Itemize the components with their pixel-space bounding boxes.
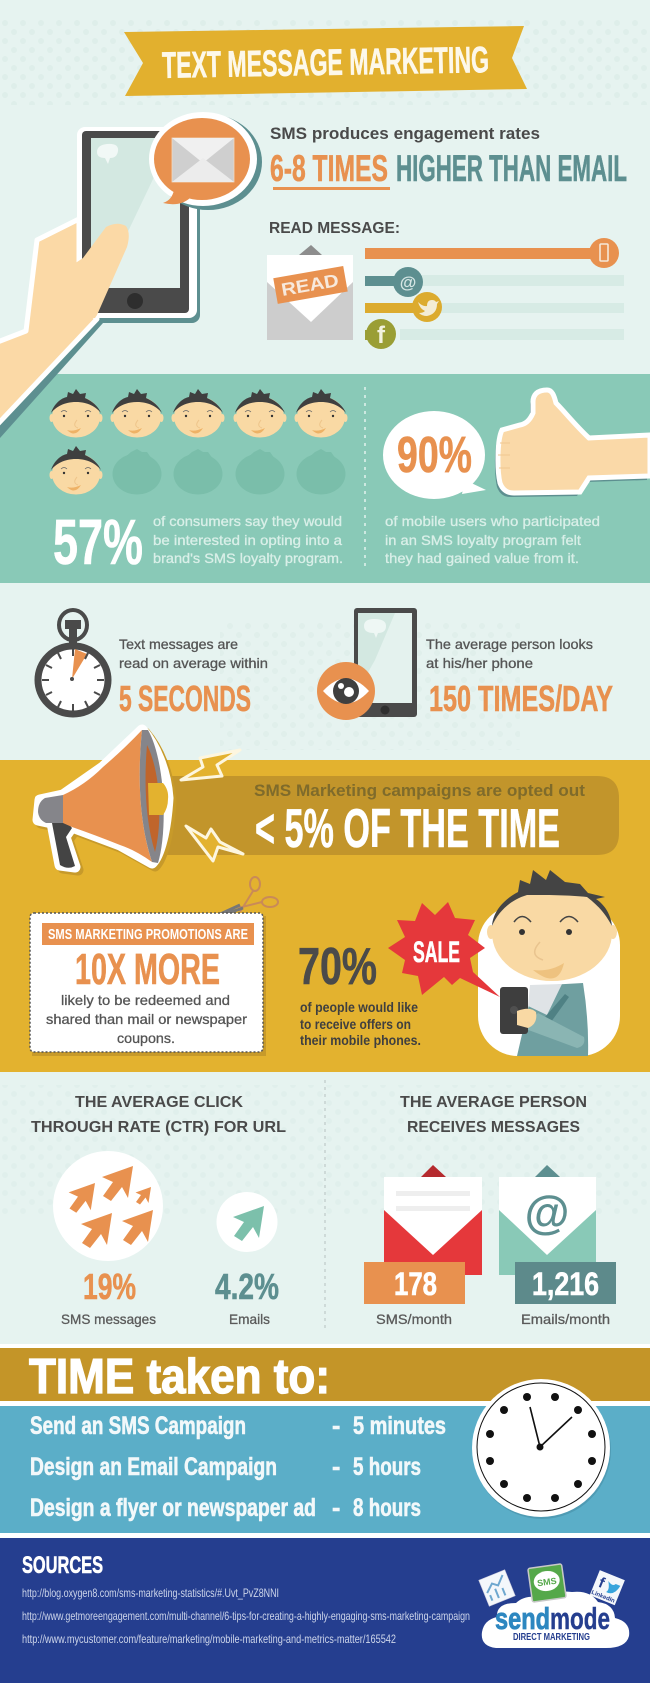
logo tile: SMS: [528, 1564, 566, 1602]
panel: time list: [0, 1406, 650, 1533]
phone: [77, 127, 200, 323]
time row: SMS: Send an SMS Campaign: [30, 1412, 246, 1440]
icon: scissors: [205, 877, 278, 921]
heading: average person receives: [400, 1094, 587, 1136]
stat: 1,216: 1,216: [532, 1266, 599, 1302]
coupon text: [46, 992, 247, 1046]
text: phone looks: The average person looks: [426, 636, 593, 652]
heading: average person receives: THE AVERAGE PERSON: [400, 1094, 587, 1111]
icon: sale starburst: [388, 902, 500, 997]
stat: 70%: 70%: [298, 938, 377, 996]
text: 70% description: [300, 999, 421, 1048]
bar: twitter: [365, 292, 624, 322]
icon: phone with eye: [317, 608, 417, 720]
stat: 90%: 90%: [397, 426, 472, 483]
message bubble: [149, 112, 262, 210]
text: 57% description: of consumers say they would: [153, 513, 342, 529]
bar: facebook: f: [377, 322, 386, 349]
logo: sendmode: DIRECT MARKETING: [513, 1632, 590, 1643]
headline: 6-8 times: 6-8 TIMES: [270, 148, 388, 189]
background dot pattern: middle: [220, 620, 520, 750]
source links: http://blog.oxygen8.com/sms-marketing-statistics/#.Uvt_PvZ8NNI: [22, 1586, 279, 1600]
coupon text: shared than mail or newspaper: [46, 1011, 247, 1027]
text: phone looks: [426, 636, 593, 671]
heading: click through rate: [31, 1094, 286, 1136]
pictogram: six of ten faces: [50, 389, 348, 494]
sale text: SALE: [413, 936, 460, 969]
head: [487, 925, 495, 939]
stat: 19%: 19%: [83, 1266, 136, 1307]
text: opted out: SMS Marketing campaigns are opted out: [254, 781, 585, 800]
source links: http://www.mycustomer.com/feature/marketing/mobile-marketing-and-metrics-matter/165542: [22, 1632, 396, 1646]
icon: email arrow circle: [216, 1192, 278, 1252]
source links: http://www.getmoreengagement.com/multi-channel/6-tips-for-creating-a-highly-engaging-sms-marketing-campaign: [22, 1609, 470, 1623]
panel: opt-out pill: [165, 776, 619, 855]
label: SMS messages: SMS messages: [61, 1311, 156, 1327]
heading: click through rate: THE AVERAGE CLICK: [75, 1094, 243, 1111]
panel: coupon: SMS MARKETING PROMOTIONS ARE: [48, 926, 248, 943]
title banner: [124, 26, 527, 96]
text: 57% description: be interested in opting into a: [153, 532, 342, 548]
heading: read message: READ MESSAGE:: [269, 220, 400, 237]
logo tile: social: LinkedIn: [590, 1590, 616, 1605]
panel: sources: [0, 1538, 650, 1683]
stat: 5 seconds: 5 SECONDS: [119, 678, 251, 719]
panel: coupon: [30, 913, 266, 1056]
text: engagement rates: SMS produces engagement rates: [270, 124, 540, 143]
bar chart: read rates by channel: [365, 238, 624, 349]
icon: lightning bolt top: [181, 750, 240, 780]
time row: flyer: -: [332, 1494, 340, 1522]
text: read within: read on average within: [119, 655, 268, 671]
text: 70% description: to receive offers on: [300, 1016, 411, 1032]
text: 90% description: in an SMS loyalty program felt: [385, 532, 581, 548]
stat: 4.2%: 4.2%: [215, 1266, 279, 1307]
text: 70% description: their mobile phones.: [300, 1032, 421, 1048]
time row: email: -: [332, 1453, 340, 1481]
bar: email: @: [400, 273, 416, 292]
text: read within: Text messages are: [119, 636, 238, 652]
bar: email: [365, 267, 624, 297]
speech bubble: 90%: [383, 411, 486, 499]
text: 90% description: [385, 513, 600, 566]
icon: stopwatch: [38, 610, 108, 714]
logo tile: SMS: SMS: [537, 1576, 557, 1588]
icon: teal envelope with 1,216: @: [525, 1186, 569, 1238]
heading: sources: SOURCES: [22, 1552, 103, 1579]
phone in hand: [500, 987, 528, 1034]
panel: gold band: [0, 760, 650, 1072]
stat: 178: 178: [394, 1266, 437, 1302]
panel: teal statistics band: [0, 374, 650, 583]
text: 57% description: [153, 513, 343, 566]
heading: click through rate: THROUGH RATE (CTR) FOR URL: [31, 1119, 286, 1136]
bar: facebook: [365, 319, 624, 349]
heading: time taken to: TIME taken to:: [29, 1350, 330, 1404]
panel: time header: [0, 1348, 650, 1401]
time row: SMS: 5 minutes: [353, 1412, 446, 1440]
icon: read envelope: [267, 245, 353, 340]
background dot pattern: top: [0, 20, 650, 105]
text: 90% description: of mobile users who participated: [385, 513, 600, 529]
illustration: phone in hand with message bubble: [0, 112, 262, 438]
time row: flyer: Design a flyer or newspaper ad: [30, 1494, 316, 1522]
megaphone shadow and outline: [38, 730, 171, 870]
logo wordmark: send: [495, 1601, 550, 1636]
white separator strip: [0, 1344, 650, 1683]
logo tile: social: f: [596, 1574, 608, 1592]
icon: teal envelope with 1,216: [499, 1165, 616, 1304]
text: read within: [119, 636, 268, 671]
heading: average person receives: RECEIVES MESSAGES: [407, 1119, 580, 1136]
time row: email: Design an Email Campaign: [30, 1453, 277, 1481]
stat: 57%: 57%: [53, 506, 143, 578]
icon: lightning bolt bottom: [186, 826, 243, 861]
bar: phone: [365, 238, 619, 268]
coupon stat: 10X MORE: [75, 945, 220, 994]
label: emails per month: Emails/month: [521, 1311, 610, 1327]
logo: sendmode: mode: [550, 1601, 610, 1636]
coupon text: likely to be redeemed and: [61, 992, 230, 1008]
background dot pattern: lower: [0, 1085, 650, 1215]
text: 70% description: of people would like: [300, 999, 418, 1015]
hand: [0, 219, 129, 438]
time row: SMS: -: [332, 1412, 340, 1440]
icon: megaphone: [38, 730, 171, 870]
label: SMS per month: SMS/month: [376, 1311, 452, 1327]
icon: thumbs up: [495, 390, 650, 497]
coupon header: [42, 923, 254, 945]
coupon text: coupons.: [117, 1030, 175, 1046]
logo cloud: [482, 1592, 629, 1648]
text: 57% description: brand's SMS loyalty program.: [153, 550, 343, 566]
illustration: man with phone: [478, 870, 620, 1056]
time row: email: 5 hours: [353, 1453, 421, 1481]
icon: SMS arrows circle: [53, 1151, 163, 1261]
text: 90% description: they had gained value from it.: [385, 550, 579, 566]
logo tile: chart: [479, 1570, 515, 1606]
read label: READ: [280, 270, 340, 300]
time row: SMS: [30, 1412, 446, 1440]
icon: red envelope with 178: [364, 1165, 482, 1304]
logo tile: social: [590, 1570, 625, 1605]
underline for 6-8 times: [273, 187, 390, 190]
icon: clock: [472, 1379, 611, 1519]
logo: sendmode: [479, 1564, 629, 1648]
body: [517, 983, 588, 1056]
label: emails: Emails: [229, 1311, 270, 1327]
text: phone looks: at his/her phone: [426, 655, 533, 671]
source links: [22, 1586, 470, 1646]
time row: flyer: 8 hours: [353, 1494, 421, 1522]
